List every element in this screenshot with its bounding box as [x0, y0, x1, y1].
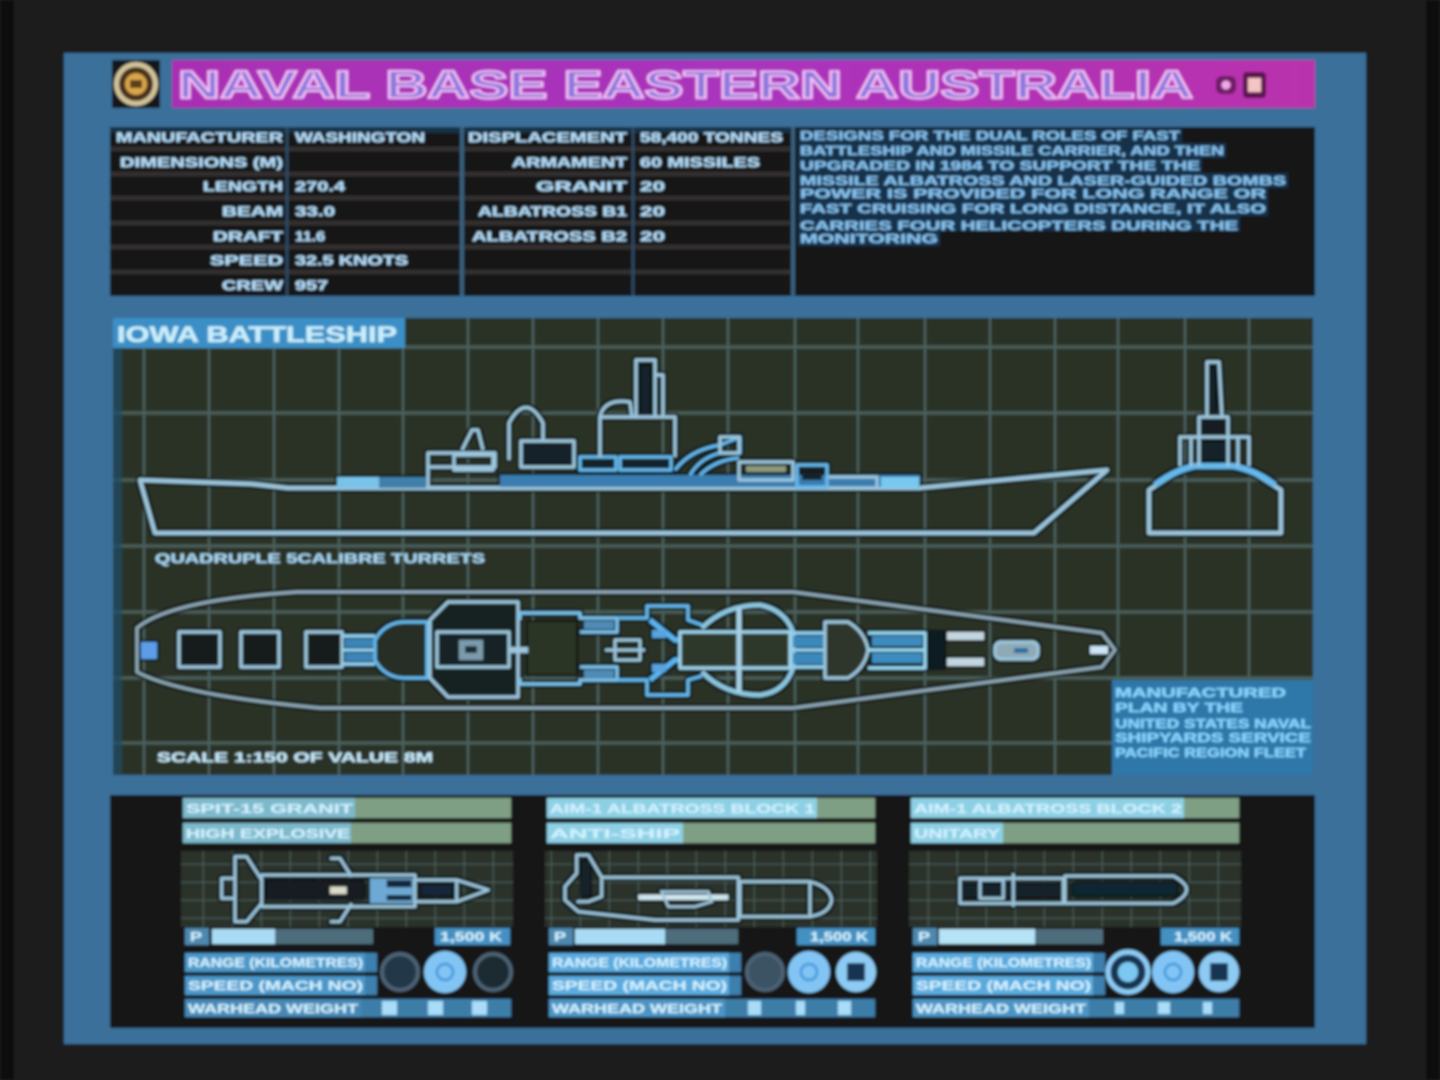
statistics rows: RANGE (KILOMETRES)	[916, 955, 1091, 970]
heading tab	[113, 318, 405, 348]
ship side elevation	[140, 360, 1107, 533]
ship plan view	[137, 592, 1115, 708]
description text: BATTLESHIP AND MISSILE CARRIER, AND THEN	[800, 143, 1224, 158]
description text: UPGRADED IN 1984 TO SUPPORT THE THE	[800, 158, 1200, 173]
statistics rows: WARHEAD WEIGHT	[916, 1001, 1086, 1016]
missile card: Albatross Block 1: AIM-1 ALBATROSS BLOCK 1	[550, 801, 815, 816]
panel: blueprint	[113, 318, 1313, 775]
range bar	[185, 928, 510, 945]
specification table: displacement and armament: ARMAMENT	[512, 154, 628, 170]
specification table: displacement and armament: ALBATROSS B1	[478, 203, 627, 219]
missile card: Albatross Block 2	[909, 798, 1241, 1017]
missile card: Granit: SPIT-15 GRANIT	[186, 801, 353, 816]
statistics rows: SPEED (MACH NO)	[552, 978, 727, 993]
caption: turrets: QUADRUPLE 5CALIBRE TURRETS	[155, 550, 485, 566]
specification table: displacement and armament: ALBATROSS B2	[472, 228, 627, 244]
specification table: ship dimensions: 32.5 KNOTS	[295, 252, 408, 268]
specification table: ship dimensions: LENGTH	[203, 178, 283, 194]
statistics rows: SPEED (MACH NO)	[188, 978, 363, 993]
icon: naval emblem	[112, 60, 160, 108]
specification table: displacement and armament: GRANIT	[536, 178, 628, 194]
missile card: Albatross Block 2: UNITARY	[914, 826, 1000, 841]
range bar: 1,500 K	[440, 929, 503, 944]
specification table: displacement and armament: 60 MISSILES	[640, 154, 760, 170]
specification table: ship dimensions: DRAFT	[213, 228, 284, 244]
description text	[798, 128, 1288, 246]
callout: manufacturing note: MANUFACTURED	[1115, 685, 1286, 700]
specification table: displacement and armament: 20	[640, 228, 665, 244]
statistics rows	[549, 953, 875, 1017]
missile card: Granit: HIGH EXPLOSIVE	[186, 826, 350, 841]
range bar	[549, 928, 875, 945]
header bar	[172, 60, 1315, 108]
specification table: ship dimensions: 270.4	[295, 178, 345, 194]
specification table: ship dimensions: MANUFACTURER	[116, 129, 283, 145]
specification table: ship dimensions: 11.6	[295, 228, 325, 244]
missile diagram: Albatross Block 1	[565, 855, 832, 920]
specification table: ship dimensions: DIMENSIONS (M)	[120, 154, 283, 170]
icon: header indicators	[1216, 72, 1266, 98]
specification table: ship dimensions: WASHINGTON	[295, 129, 425, 145]
range bar: 1,500 K	[1174, 929, 1233, 944]
range bar: P	[918, 929, 930, 944]
statistics rows: WARHEAD WEIGHT	[552, 1001, 722, 1016]
caption: scale: SCALE 1:150 OF VALUE 8M	[157, 749, 433, 765]
missile card: Granit	[181, 798, 513, 1017]
callout: manufacturing note: UNITED STATES NAVAL	[1115, 716, 1311, 731]
statistics rows	[185, 953, 511, 1017]
specification table: displacement and armament	[468, 129, 783, 244]
panel: specifications	[110, 127, 1315, 296]
missile card: Albatross Block 1	[545, 798, 877, 1017]
specification table: displacement and armament: 20	[640, 178, 665, 194]
description text: MONITORING	[800, 231, 938, 246]
header background	[172, 60, 1315, 108]
icons: performance dials	[382, 951, 511, 993]
range bar: P	[554, 929, 566, 944]
callout: manufacturing note: PLAN BY THE	[1115, 700, 1243, 715]
range bar: P	[190, 929, 202, 944]
missile diagram: Albatross Block 2	[960, 873, 1187, 907]
range bar	[913, 928, 1239, 945]
description text: DESIGNS FOR THE DUAL ROLES OF FAST	[800, 128, 1180, 143]
description text: FAST CRUISING FOR LONG DISTANCE, IT ALSO	[800, 201, 1266, 216]
statistics rows: RANGE (KILOMETRES)	[188, 955, 363, 970]
statistics rows: RANGE (KILOMETRES)	[552, 955, 727, 970]
missile card: Albatross Block 2: AIM-1 ALBATROSS BLOCK 2	[914, 801, 1182, 816]
specification table: ship dimensions: BEAM	[222, 203, 283, 219]
title: NAVAL BASE EASTERN AUSTRALIA	[178, 64, 1193, 107]
specification table: displacement and armament: 58,400 TONNES	[640, 129, 783, 145]
panel: missile comparison	[110, 795, 1315, 1028]
specification table: displacement and armament: 20	[640, 203, 665, 219]
statistics rows: WARHEAD WEIGHT	[188, 1001, 358, 1016]
specification table: displacement and armament: DISPLACEMENT	[468, 129, 628, 145]
specification table: ship dimensions: SPEED	[210, 252, 283, 268]
description text: CARRIES FOUR HELICOPTERS DURING THE	[800, 218, 1239, 233]
callout: manufacturing note: PACIFIC REGION FLEET	[1115, 745, 1306, 760]
missile card: Albatross Block 1: ANTI-SHIP	[550, 826, 681, 841]
heading tab: IOWA BATTLESHIP	[117, 322, 397, 347]
ship front elevation	[1149, 362, 1281, 533]
icons: performance dials	[747, 951, 876, 993]
specification table: ship dimensions: 957	[295, 277, 328, 293]
specification table: ship dimensions	[116, 129, 425, 293]
description text: POWER IS PROVIDED FOR LONG RANGE OR	[800, 186, 1267, 201]
statistics rows: SPEED (MACH NO)	[916, 978, 1091, 993]
icons: performance dials	[1108, 951, 1239, 993]
specification table: ship dimensions: CREW	[222, 277, 284, 293]
statistics rows	[913, 953, 1239, 1017]
missile diagram: Granit	[222, 857, 488, 922]
callout: manufacturing note	[1112, 680, 1313, 775]
description text: MISSILE ALBATROSS AND LASER-GUIDED BOMBS	[800, 173, 1286, 188]
range bar: 1,500 K	[810, 929, 869, 944]
callout: manufacturing note: SHIPYARDS SERVICE	[1115, 730, 1311, 745]
specification table: ship dimensions: 33.0	[295, 203, 335, 219]
